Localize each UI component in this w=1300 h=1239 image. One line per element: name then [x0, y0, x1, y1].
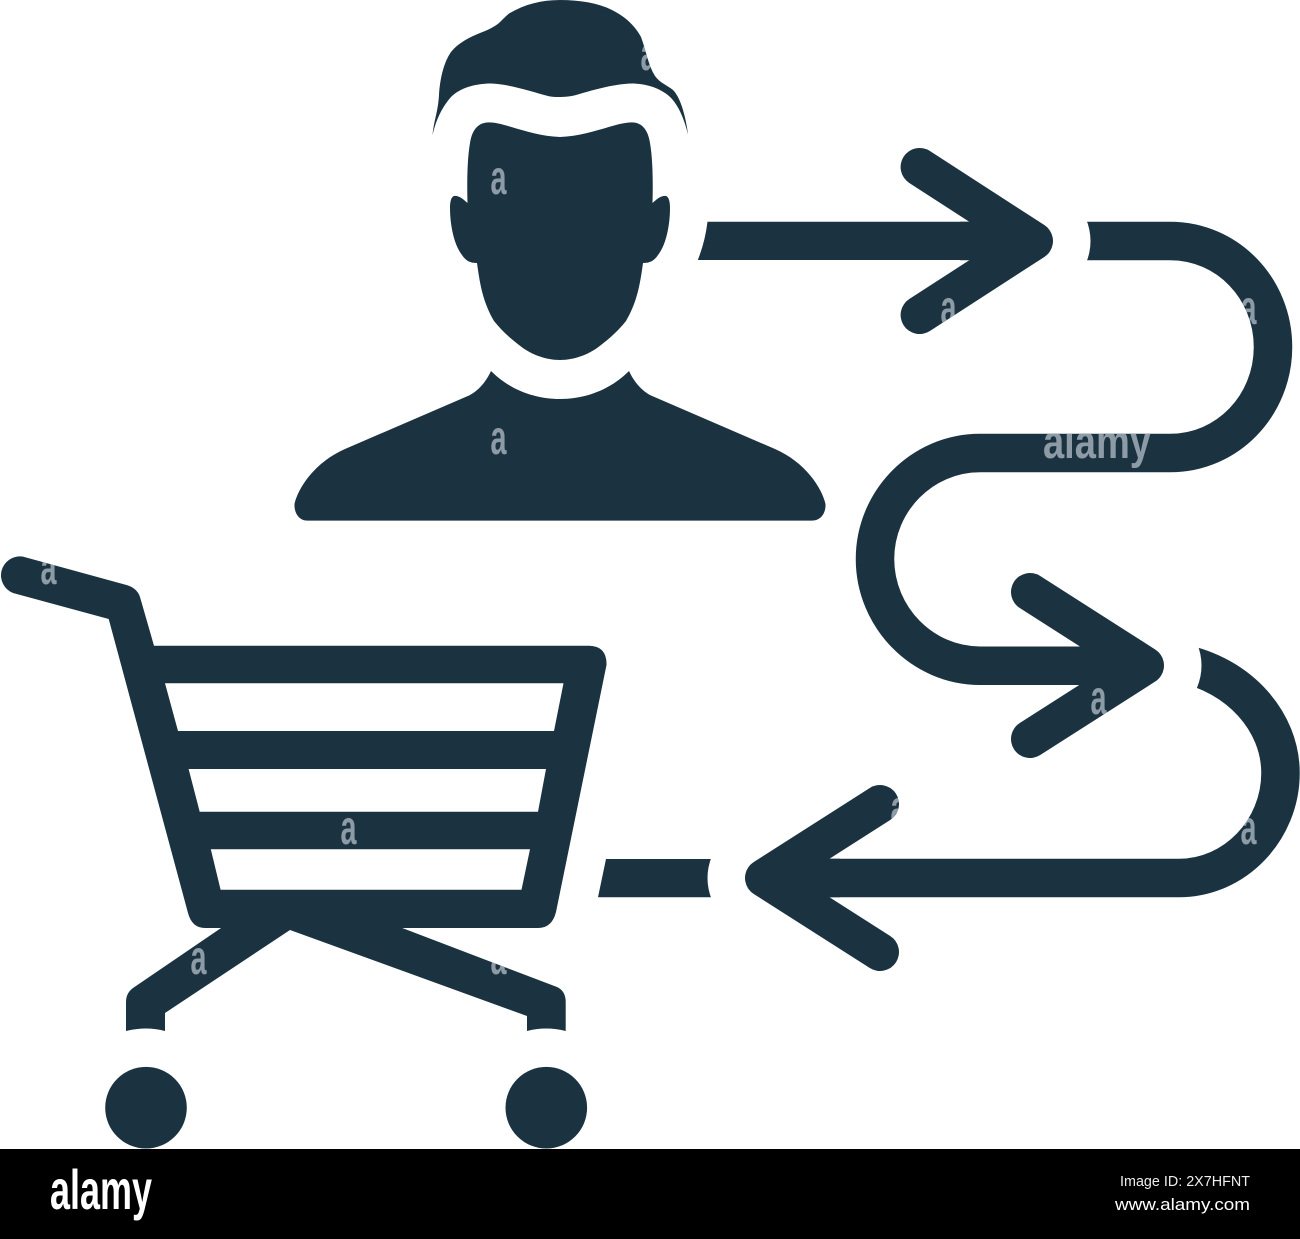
website: www.alamy.com — [1114, 1195, 1250, 1214]
watermark marks: a — [490, 412, 507, 465]
cart right wheel — [506, 1067, 587, 1148]
watermark marks: a — [490, 932, 507, 985]
watermark marks: a — [40, 542, 57, 595]
watermark marks: a — [890, 782, 907, 835]
icon: shopping cart — [1, 556, 607, 1148]
person face — [450, 122, 670, 360]
arrow: person to path — [698, 222, 1000, 260]
icon: person — [294, 0, 826, 521]
watermark marks: a — [1240, 282, 1257, 335]
cart legs — [126, 926, 566, 1031]
image id: Image ID: 2X7HFNT — [1120, 1173, 1250, 1190]
cart basket — [1, 556, 607, 928]
arrow: path to cart — [598, 592, 1280, 952]
watermark marks: a — [190, 932, 207, 985]
person hair — [432, 0, 688, 135]
watermark marks: a — [490, 152, 507, 205]
watermark marks — [40, 28, 1257, 985]
winding path with middle arrow — [875, 167, 1273, 666]
watermark marks: a — [1240, 802, 1257, 855]
watermark marks: a — [1090, 672, 1107, 725]
footer bar — [0, 1149, 1300, 1239]
cart left wheel — [105, 1067, 187, 1148]
watermark marks: a — [940, 282, 957, 335]
footer logo: alamy — [50, 1158, 152, 1221]
watermark marks: alamy — [1043, 416, 1151, 469]
watermark marks: a — [640, 28, 657, 81]
watermark marks: a — [340, 802, 357, 855]
person shoulders — [294, 371, 826, 521]
